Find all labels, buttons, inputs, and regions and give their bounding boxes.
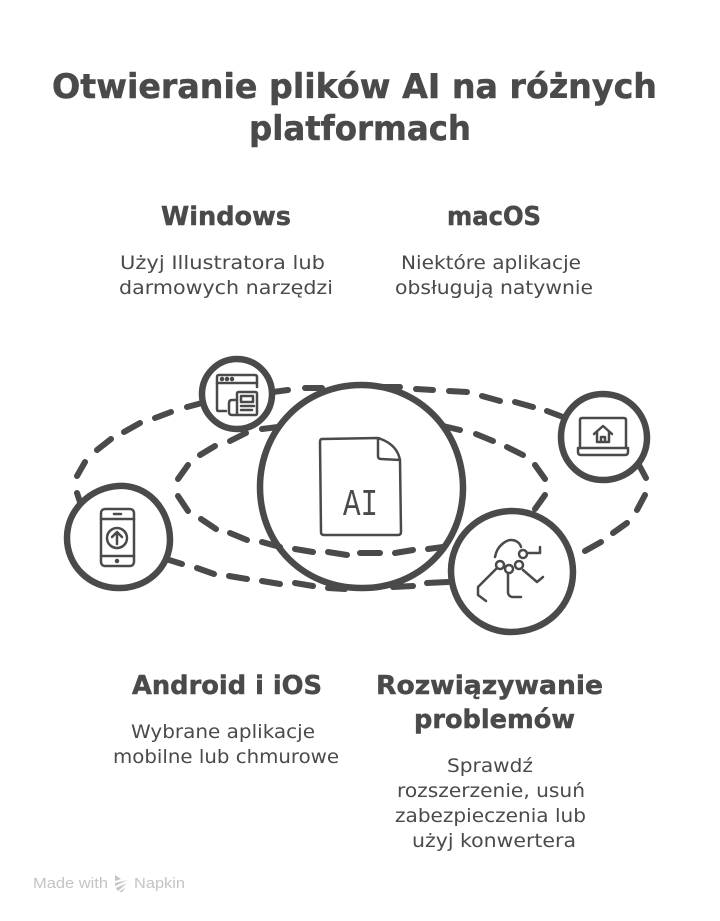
- text: Android description: Wybrane aplikacje: [131, 721, 315, 743]
- node: laptop icon: [561, 394, 647, 480]
- panel: Rozwiązywanie problemów: [376, 671, 603, 852]
- icon: Napkin logo: [115, 875, 128, 892]
- heading: Rozwiązywanie problemów: Rozwiązywanie: [376, 671, 603, 701]
- text: troubleshooting description: użyj konwertera: [412, 830, 576, 852]
- heading: macOS: macOS: [447, 202, 541, 232]
- icon: laptop with house: [578, 418, 628, 455]
- heading: Windows: Windows: [161, 202, 291, 232]
- text: troubleshooting description: [395, 755, 586, 852]
- footer: Made with Napkin: Made with: [33, 876, 108, 892]
- title: Otwieranie plików AI na różnych: [52, 67, 657, 107]
- icon: AI document: AI: [343, 484, 378, 527]
- node: browser and newspaper icon: [202, 359, 272, 429]
- panel: macOS: [395, 202, 593, 299]
- text: macOS description: Niektóre aplikacje: [401, 252, 581, 274]
- title: platformach: [249, 109, 471, 149]
- text: Windows description: darmowych narzędzi: [119, 277, 333, 299]
- text: troubleshooting description: zabezpieczenia lub: [395, 805, 586, 827]
- icon: connected nodes: [478, 540, 543, 601]
- heading: Android i iOS: Android i iOS: [132, 671, 322, 701]
- text: troubleshooting description: rozszerzenie, usuń: [397, 780, 585, 802]
- panel: Windows: [119, 202, 333, 299]
- panel: Android i iOS: [113, 671, 339, 768]
- node: troubleshooting network icon: [451, 511, 573, 632]
- text: Android description: [113, 721, 339, 768]
- title: [52, 67, 657, 149]
- text: troubleshooting description: Sprawdź: [447, 755, 533, 777]
- icon: AI document: [320, 438, 401, 535]
- icon: browser window: [217, 375, 257, 415]
- footer: Made with Napkin: Napkin: [134, 876, 185, 892]
- heading: Rozwiązywanie problemów: problemów: [414, 705, 575, 735]
- central circle with AI file: [260, 385, 463, 588]
- text: Windows description: Użyj Illustratora lub: [120, 252, 325, 274]
- text: Android description: mobilne lub chmurowe: [113, 746, 339, 768]
- text: macOS description: obsługują natywnie: [395, 277, 593, 299]
- text: macOS description: [395, 252, 593, 299]
- icon: phone with upload arrow: [101, 509, 134, 566]
- node: phone icon: [67, 486, 170, 588]
- footer: Made with Napkin: [33, 875, 185, 892]
- diagram: dashed orbits: [77, 387, 646, 589]
- text: Windows description: [119, 252, 333, 299]
- heading: Rozwiązywanie problemów: [376, 671, 603, 735]
